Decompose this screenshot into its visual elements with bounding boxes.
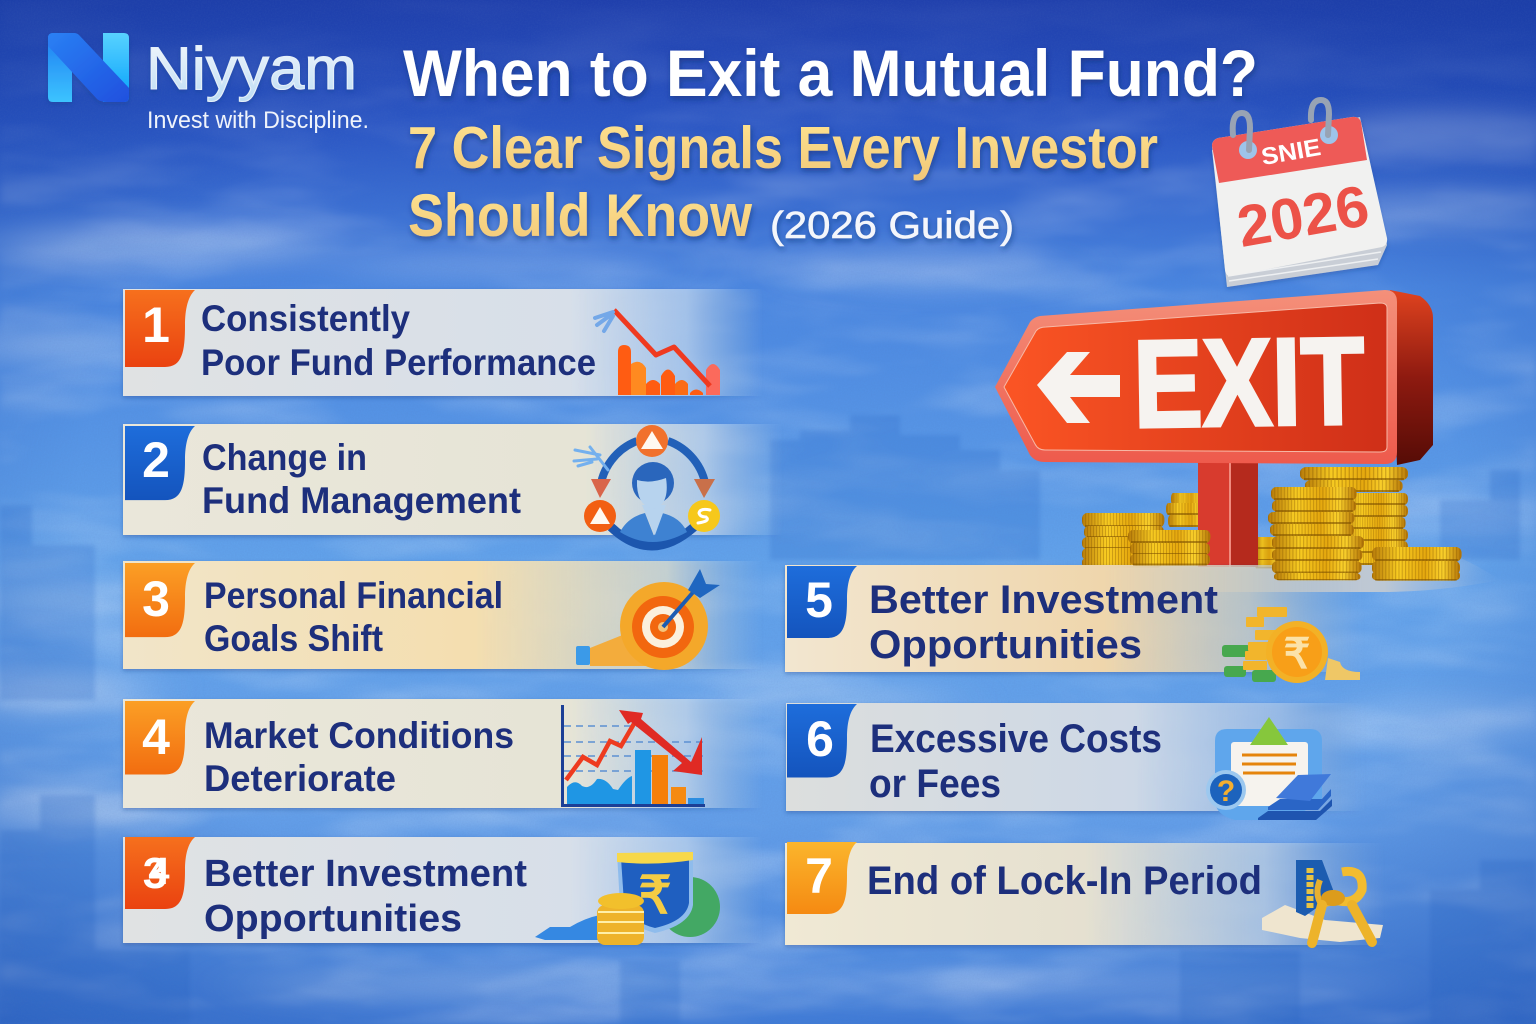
icon: fee document: ? (1217, 775, 1235, 808)
exit text: EXIT (1132, 312, 1365, 454)
icon: N mark (48, 33, 129, 102)
post of exit sign (1198, 462, 1258, 567)
sign face (1004, 303, 1387, 452)
icon: falling bar chart (595, 310, 720, 395)
signal 5 text: Opportunities (869, 623, 1142, 667)
banner 3 (123, 561, 763, 669)
badge 3 (125, 563, 195, 637)
signal text: Better Investment (204, 853, 527, 895)
signal 5 text: Better Investment (869, 578, 1218, 622)
signal 4 text (204, 715, 514, 799)
signal text: Opportunities (204, 898, 462, 940)
number 2: 2 (142, 432, 170, 488)
icon: keys and lock-in book (1262, 860, 1383, 943)
signal 6 text (869, 717, 1162, 806)
calendar year: 2026 (1232, 173, 1374, 260)
signal 1 left (123, 289, 763, 396)
banner 4 (123, 699, 763, 808)
logo: Niyyam (48, 33, 369, 134)
ground under sign (1040, 545, 1500, 592)
number 4: 4 (142, 709, 170, 765)
signal 3 text: Personal Financial (204, 575, 503, 616)
signal 2 text: Fund Management (202, 480, 521, 521)
signal 2 left (123, 424, 783, 546)
signal 3 left (123, 561, 763, 670)
badge 1 (125, 290, 195, 367)
chart: rising and falling market (561, 705, 705, 807)
icon: coin and stacks (1222, 607, 1360, 683)
icon: coin and stacks: ₹ (1284, 630, 1310, 677)
signal 3 text (204, 575, 503, 659)
number 6: 6 (806, 711, 834, 767)
badge 6 (787, 704, 857, 777)
banner 1 (123, 289, 763, 396)
signal 1 text: Consistently (201, 298, 410, 339)
badge 4 (125, 701, 195, 774)
badge 5 (787, 566, 857, 638)
brand name: Niyyam (146, 35, 357, 102)
title line 1: When to Exit a Mutual Fund? (403, 36, 1258, 110)
icon: rupee shield and coins (535, 852, 720, 945)
signal text (204, 853, 527, 940)
sign side panel (1390, 290, 1433, 465)
banner 7 (785, 843, 1385, 945)
signal 4 text: Market Conditions (204, 715, 514, 756)
tagline: Invest with Discipline. (147, 107, 369, 134)
coins behind sign (1082, 467, 1408, 568)
icon: exit arrow (1037, 352, 1120, 423)
signal 1 text (201, 298, 596, 383)
signal 6 right (786, 703, 1366, 820)
signal 5 text (869, 578, 1218, 667)
signal 7 text: End of Lock-In Period (867, 859, 1262, 903)
banner 6 (786, 703, 1366, 811)
number 7: 7 (805, 848, 833, 904)
signal 4 left (123, 699, 763, 808)
signal 4 text: Deteriorate (204, 758, 396, 799)
signal 1 text: Poor Fund Performance (201, 342, 596, 383)
exit sign (995, 290, 1433, 465)
signal 5 left: better investment (123, 837, 763, 945)
signal 6 text: Excessive Costs (870, 717, 1162, 761)
number 3: 3 (142, 571, 170, 627)
guide year note: (2026 Guide) (770, 205, 1014, 247)
signal 3 text: Goals Shift (204, 618, 383, 659)
signal 5 right (785, 565, 1365, 683)
badge 7 (787, 842, 857, 914)
signal 2 text: Change in (202, 437, 367, 478)
icon: fund manager cycle (574, 425, 720, 546)
icon: target and arrow (576, 569, 720, 670)
subtitle line 3: Should Know (408, 182, 752, 249)
number 3 over 4: 4 (148, 851, 170, 893)
signal 7 right (785, 842, 1385, 945)
banner 2 (123, 424, 783, 535)
calendar month label: SNIE (1259, 134, 1323, 171)
badge 2 (125, 426, 195, 500)
number 3 over 4: 3 (143, 849, 167, 898)
number 1: 1 (142, 297, 170, 353)
signal 2 text (202, 437, 521, 521)
icon: fee document (1206, 717, 1332, 820)
coins in front (1128, 487, 1462, 581)
badge overlapped number (125, 837, 195, 909)
title (403, 36, 1258, 249)
banner 5 right (785, 565, 1365, 672)
banner 5 left (123, 837, 763, 943)
subtitle line 2: 7 Clear Signals Every Investor (408, 115, 1158, 181)
sign rim (995, 290, 1397, 464)
icon: rupee shield and coins: ₹ (638, 867, 672, 925)
number 5: 5 (805, 572, 833, 628)
icon: calendar 2026 (1212, 100, 1387, 287)
signal 6 text: or Fees (869, 762, 1001, 806)
